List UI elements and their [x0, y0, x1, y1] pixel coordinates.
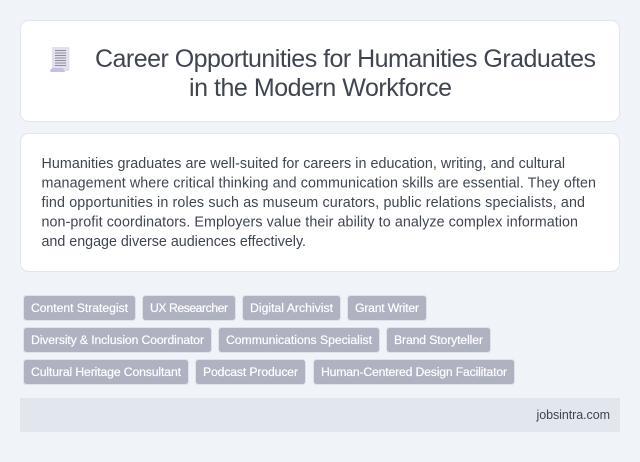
tag: Human-Centered Design Facilitator — [314, 360, 514, 384]
tag: Cultural Heritage Consultant: Cultural Heritage Consultant — [31, 365, 182, 379]
tag: Digital Archivist: Digital Archivist — [250, 301, 334, 315]
tag: Diversity & Inclusion Coordinator: Diversity & Inclusion Coordinator — [31, 333, 204, 347]
tag: Cultural Heritage Consultant — [24, 360, 188, 384]
tag: Podcast Producer — [196, 360, 306, 384]
panel: description — [20, 134, 620, 272]
title: Career Opportunities for Humanities Graduates — [95, 45, 596, 73]
tag: Human-Centered Design Facilitator: Human-Centered Design Facilitator — [321, 365, 507, 379]
tag: Communications Specialist — [218, 328, 380, 352]
text block: description — [42, 156, 596, 250]
tag: Podcast Producer: Podcast Producer — [203, 365, 298, 379]
title — [95, 45, 596, 102]
text block: description: management where critical thinking and communication skills are essential. They often — [42, 176, 596, 192]
tag: UX Researcher: UX Researcher — [150, 301, 228, 315]
tag: Digital Archivist — [242, 296, 340, 320]
tag: Grant Writer — [348, 296, 426, 320]
tag: Brand Storyteller: Brand Storyteller — [394, 333, 483, 347]
text block: description: Humanities graduates are well-suited for careers in education, writing, and cultural — [42, 156, 565, 172]
text block: description: non-profit coordinators. Employers value their ability to analyze complex information — [42, 214, 578, 230]
footer — [20, 398, 620, 432]
tag: Brand Storyteller — [386, 328, 490, 352]
panel: header — [20, 20, 620, 122]
tags — [24, 296, 514, 384]
tag: UX Researcher — [142, 296, 236, 320]
tag: Grant Writer: Grant Writer — [355, 301, 419, 315]
tag: Content Strategist — [24, 296, 136, 320]
text block: description: find opportunities in roles such as museum curators, public relations specialists, and — [42, 195, 585, 211]
tag: Diversity & Inclusion Coordinator — [24, 328, 212, 352]
icon: document scroll — [50, 47, 70, 72]
text block: description: and engage diverse audiences effectively. — [42, 234, 306, 250]
tag: Communications Specialist: Communications Specialist — [226, 333, 373, 347]
footer: jobsintra.com — [536, 408, 610, 422]
title: in the Modern Workforce — [189, 74, 452, 102]
tag: Content Strategist: Content Strategist — [31, 301, 129, 315]
